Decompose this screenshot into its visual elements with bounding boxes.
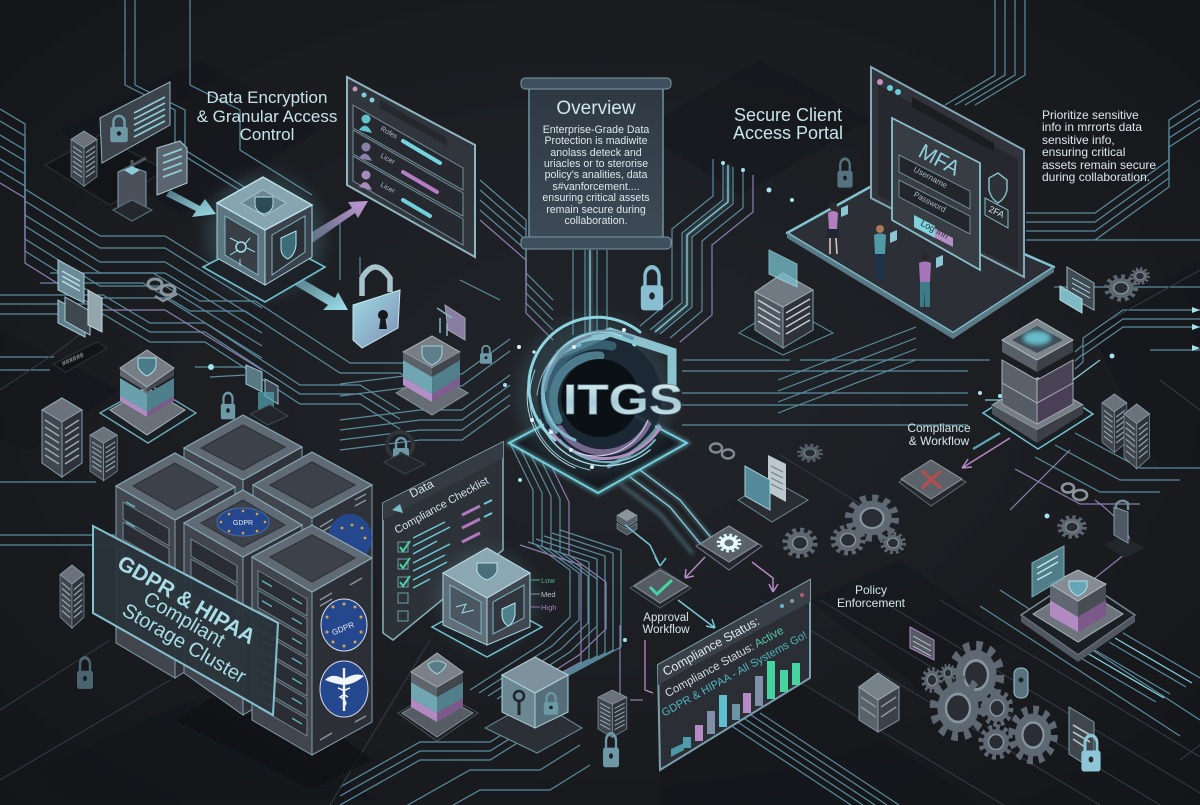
panel: compliance status bbox=[658, 580, 810, 770]
tower: center bbox=[184, 490, 302, 715]
text block: prioritize sensitive info bbox=[1042, 108, 1156, 184]
icon: chain links bbox=[710, 444, 734, 458]
user row 3 bbox=[353, 156, 463, 245]
icon: server small bbox=[90, 427, 117, 481]
label: policy enforcement: Policy bbox=[855, 583, 887, 597]
login card bbox=[892, 118, 980, 270]
heading: secure client access portal: Access Portal bbox=[733, 123, 843, 143]
icon: policy sheet bbox=[910, 627, 934, 660]
heading: data encryption: & Granular Access bbox=[197, 107, 337, 126]
icon: document with lock bbox=[1069, 707, 1101, 772]
text block: overview body: collaboration. bbox=[564, 215, 628, 227]
text block: overview body: uriacles or to sterorise bbox=[544, 158, 648, 170]
status line: Compliance Status: Active bbox=[663, 625, 786, 700]
icon: right stack tile bbox=[1021, 570, 1135, 662]
arrow: stack to approval bbox=[625, 525, 666, 566]
banner: storage cluster label: GDPR & HIPAA bbox=[113, 551, 260, 649]
text block: overview body: Enterprise-Grade Data bbox=[543, 124, 649, 136]
arrow: gear to status bbox=[752, 562, 778, 592]
wordmark: ITGS bbox=[563, 376, 683, 424]
2FA badge: 2FA bbox=[987, 204, 1006, 220]
badge: GDPR top: GDPR bbox=[233, 520, 253, 527]
arrow: data to cube bbox=[166, 190, 216, 217]
label: approval workflow: Approval bbox=[643, 612, 689, 624]
icon: large padlock bbox=[353, 267, 400, 348]
heading: data encryption: Control bbox=[240, 125, 294, 144]
icon: top-left workstation bbox=[45, 82, 187, 221]
label: compliance & workflow bbox=[907, 421, 971, 448]
icon: mini lock bbox=[221, 393, 235, 419]
platform bbox=[787, 187, 1054, 333]
user row 2 bbox=[353, 130, 463, 216]
panel: client portal bbox=[787, 67, 1054, 339]
icon: top shield bbox=[255, 197, 273, 214]
user row 1 bbox=[353, 105, 463, 190]
icon: folder and gears bbox=[1060, 267, 1148, 313]
status line: all systems go: GDPR & HIPAA - All Systems Go! bbox=[660, 629, 809, 719]
heading: data encryption bbox=[197, 88, 337, 144]
badge: GDPR bbox=[321, 599, 367, 651]
icon: chain right bbox=[1062, 484, 1087, 500]
icon: encryption cube bbox=[203, 175, 325, 302]
icon: chat panel bbox=[1032, 546, 1064, 597]
small padlock bbox=[641, 267, 663, 310]
text block: overview body bbox=[542, 124, 650, 227]
reflection bbox=[175, 680, 372, 790]
tower: left bbox=[116, 453, 235, 678]
text block: overview body: anolass deteck and bbox=[550, 147, 642, 159]
icon: access cards bbox=[246, 365, 288, 425]
logo: ITGS bbox=[509, 317, 687, 493]
icon: gear tile bbox=[696, 526, 762, 570]
tower: back bbox=[184, 415, 302, 540]
text block: prioritize sensitive info: ensuring critical bbox=[1042, 145, 1125, 159]
user row 2: Licer bbox=[379, 153, 396, 166]
username field bbox=[899, 155, 970, 209]
person 3 bbox=[919, 253, 943, 307]
heading: compliance checklist: Compliance Checklist bbox=[393, 475, 491, 537]
arrow: gear to approval bbox=[685, 557, 705, 578]
log in button bbox=[914, 215, 953, 247]
shield bbox=[558, 332, 672, 388]
label: policy enforcement bbox=[837, 583, 906, 610]
arrow: workflow to stack bbox=[973, 433, 1000, 449]
panel: compliance checklist bbox=[383, 442, 503, 640]
icon: rejection tile bbox=[899, 460, 966, 506]
badge: HIPAA caduceus bbox=[320, 661, 368, 717]
arrow: approval down bbox=[645, 640, 653, 693]
icon: small stack bbox=[617, 509, 637, 535]
person 2 bbox=[874, 225, 897, 280]
icon: server large bbox=[42, 398, 82, 477]
password field: Password bbox=[912, 190, 947, 214]
bar chart bbox=[671, 661, 800, 757]
shield icon bbox=[989, 173, 1007, 203]
text block: overview body: ensuring critical assets bbox=[542, 192, 650, 204]
browser window bbox=[871, 67, 1024, 277]
window buttons bbox=[780, 593, 804, 608]
user row 3: Licer bbox=[379, 182, 396, 195]
checklist rows bbox=[398, 500, 492, 621]
tower: front bbox=[252, 525, 372, 755]
small lock near status bbox=[603, 734, 619, 767]
icon: tiny lock bbox=[480, 346, 492, 364]
text block: overview body: policy's analities, data bbox=[545, 169, 647, 181]
heading: secure client access portal bbox=[733, 105, 843, 143]
2FA badge bbox=[985, 198, 1008, 228]
label: approval workflow bbox=[642, 612, 690, 636]
arrow: approval to status bbox=[678, 600, 715, 628]
icon: document cluster bbox=[58, 260, 102, 337]
username field: Username bbox=[912, 165, 949, 190]
label: compliance & workflow: Compliance bbox=[907, 421, 971, 435]
icon: device bbox=[437, 305, 465, 340]
tower: back right bbox=[253, 452, 372, 640]
arrow: cube to access panel bbox=[312, 201, 368, 243]
panel: overview scroll bbox=[521, 78, 671, 249]
label: approval workflow: Workflow bbox=[642, 624, 690, 636]
icon: twin servers bbox=[1102, 394, 1150, 469]
small server near status bbox=[598, 690, 627, 737]
storage cluster bbox=[77, 415, 372, 790]
heading: data: Data bbox=[407, 477, 436, 501]
text block: overview body: Protection is madiwite bbox=[544, 135, 648, 147]
icon: lock near checklist bbox=[384, 432, 425, 474]
icon: stack left bbox=[100, 350, 196, 443]
label: policy enforcement: Enforcement bbox=[837, 596, 906, 610]
arrow: cube to lock bbox=[293, 276, 348, 310]
icon: approval tile bbox=[630, 568, 691, 608]
password field bbox=[899, 180, 970, 234]
icon: network lock bbox=[230, 238, 255, 266]
swirl bbox=[527, 317, 660, 470]
badge: GDPR: GDPR bbox=[331, 620, 356, 637]
icon: stack bottom bbox=[398, 653, 478, 741]
icon: small gear chip bbox=[799, 445, 821, 461]
text block: prioritize sensitive info: during collaboration. bbox=[1042, 170, 1150, 184]
text block: prioritize sensitive info: sensitive info, bbox=[1042, 133, 1115, 147]
legend: risk levels: Low bbox=[541, 576, 555, 585]
icon: large gear cluster bbox=[923, 646, 1054, 760]
heading: data encryption: Data Encryption bbox=[207, 88, 327, 107]
icon: server behind banner bbox=[60, 565, 84, 628]
icon: risk cube bbox=[432, 548, 542, 657]
label: compliance & workflow: & Workflow bbox=[909, 434, 970, 448]
icon: gear cluster bbox=[785, 498, 904, 556]
text block: overview body: remain secure during bbox=[546, 204, 646, 216]
text block: prioritize sensitive info: info in mrrorts data bbox=[1042, 120, 1142, 134]
legend: risk levels: High bbox=[541, 603, 556, 612]
icon: lock cube bbox=[485, 657, 582, 753]
log in button: Log Inn bbox=[919, 218, 950, 241]
icon: side shield bbox=[281, 231, 296, 259]
arrow: stack to rejection tile bbox=[962, 438, 1010, 468]
badge: GDPR top bbox=[217, 508, 269, 536]
text block: prioritize sensitive info: assets remain secure bbox=[1042, 158, 1156, 172]
icon: lock right bbox=[1104, 501, 1145, 558]
icon: lock pad bbox=[1014, 668, 1028, 698]
user row 1: Rofes bbox=[379, 126, 399, 141]
heading: secure client access portal: Secure Client bbox=[734, 105, 842, 125]
banner: storage cluster label bbox=[93, 526, 278, 715]
login card: MFA bbox=[915, 140, 964, 181]
banner: storage cluster label: Storage Cluster bbox=[118, 600, 250, 688]
icon: floor lock bbox=[77, 658, 93, 689]
icon: server tower bbox=[739, 250, 833, 355]
icon: document tile bbox=[738, 455, 808, 522]
legend: risk levels bbox=[530, 576, 556, 612]
icon: key card bbox=[53, 342, 107, 372]
icon: small chain link bbox=[148, 279, 177, 301]
icon: server bottom bbox=[859, 673, 899, 732]
badge: partial EU bbox=[328, 514, 372, 562]
icon: key card: ###### bbox=[61, 352, 85, 368]
person 1 bbox=[826, 202, 848, 254]
heading: compliance status: Compliance Status: bbox=[660, 614, 762, 679]
icon: gear right bbox=[1060, 517, 1084, 537]
text block: overview body: s#vanforcement.... bbox=[552, 181, 640, 193]
icon: stack middle bbox=[396, 336, 468, 415]
icon: padlock upper bbox=[837, 159, 853, 188]
panel: access control bbox=[347, 77, 475, 257]
icon: right server stack bbox=[983, 319, 1093, 449]
text block: prioritize sensitive info: Prioritize sensitive bbox=[1042, 108, 1139, 122]
banner: storage cluster label: Compliant bbox=[140, 588, 229, 652]
legend: risk levels: Med bbox=[541, 590, 556, 599]
heading: overview: Overview bbox=[556, 98, 636, 119]
